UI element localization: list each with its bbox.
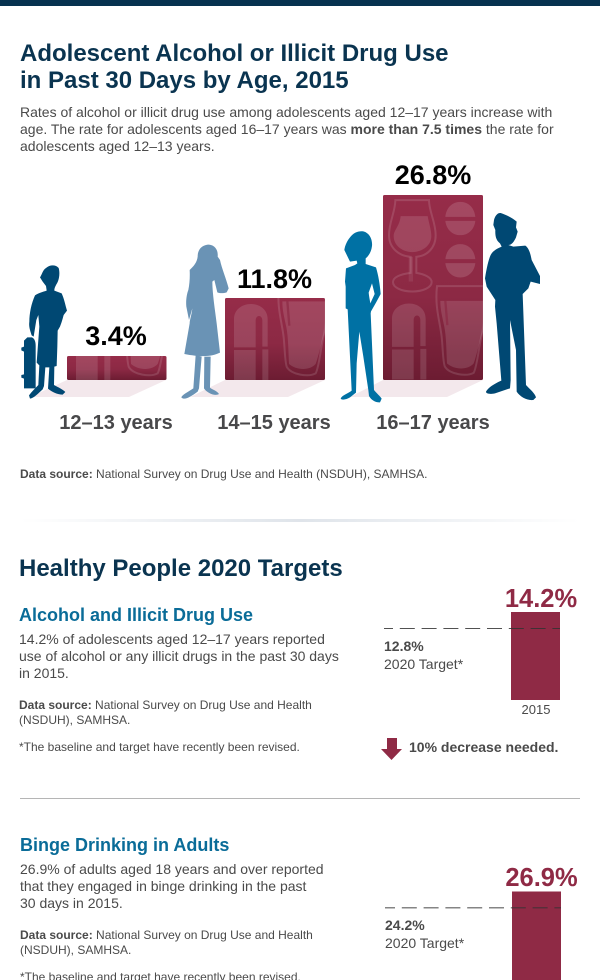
description: [20, 861, 324, 911]
shadow: bar 12–13: [30, 380, 166, 397]
icon: boy with skateboard: [21, 265, 67, 399]
target label: [385, 917, 465, 951]
bar: 14–15 years: [225, 298, 325, 380]
target label: [384, 638, 464, 672]
data source: (NSDUH), SAMHSA.: [19, 713, 130, 727]
description: use of alcohol or any illicit drugs in the past 30 days: [19, 648, 339, 664]
data source: [20, 928, 313, 957]
description: [19, 631, 339, 681]
top banner: [0, 0, 600, 6]
description: in 2015.: [19, 665, 69, 681]
value: 3.4%: 3.4%: [85, 321, 147, 351]
heading: Healthy People 2020 Targets: Healthy People 2020 Targets: [19, 555, 343, 582]
icon: teen girl: [341, 231, 382, 402]
label: 12–13 years: 12–13 years: [59, 412, 173, 434]
description: 30 days in 2015.: [20, 895, 123, 911]
label: 14–15 years: 14–15 years: [217, 412, 331, 434]
bar: 2015 value: [512, 892, 561, 980]
target label: 24.2%: [385, 917, 425, 933]
label: 16–17 years: 16–17 years: [376, 412, 490, 434]
data source: Data source: National Survey on Drug Use and Health: [19, 698, 312, 712]
intro text: age. The rate for adolescents aged 16–17 years was more than 7.5 times the rate for: [20, 121, 554, 137]
icon: girl on phone: [181, 245, 229, 399]
bar label: 2015: 2015: [522, 702, 550, 717]
shadow: bar 16–17: [350, 380, 483, 397]
data source: [19, 698, 312, 727]
chart: rates by age: [21, 160, 540, 434]
data source: chart: Data source: National Survey on Drug Use and Health (NSDUH), SAMHSA.: [20, 467, 428, 481]
subheading: Binge Drinking in Adults: [20, 835, 229, 855]
intro text: adolescents aged 12–13 years.: [20, 138, 215, 154]
value: 14.2%: 14.2%: [505, 585, 577, 613]
title: Adolescent Alcohol or Illicit Drug Use: [20, 40, 449, 67]
target line: [385, 907, 561, 909]
subheading: Alcohol and Illicit Drug Use: [19, 605, 253, 625]
target label: 12.8%: [384, 638, 424, 654]
bar: 2015 value: [511, 612, 560, 700]
target line: [384, 628, 560, 630]
description: that they engaged in binge drinking in the past: [20, 878, 307, 894]
panel: alcohol and illicit drug use: [19, 585, 577, 760]
value: 26.9%: 26.9%: [505, 864, 578, 892]
callout: decrease needed: 10% decrease needed.: [409, 739, 558, 755]
value: 11.8%: 11.8%: [237, 264, 312, 294]
data source: (NSDUH), SAMHSA.: [20, 943, 131, 957]
footnote: *The baseline and target have recently been revised.: [19, 740, 300, 754]
section divider: [20, 519, 580, 522]
intro text: [20, 104, 554, 154]
data source: Data source: National Survey on Drug Use and Health: [20, 928, 313, 942]
description: 14.2% of adolescents aged 12–17 years reported: [19, 631, 325, 647]
intro text: Rates of alcohol or illicit drug use among adolescents aged 12–17 years increase with: [20, 104, 552, 120]
icon: down arrow: [381, 738, 402, 760]
divider: [20, 798, 580, 799]
panel: binge drinking in adults: [20, 835, 578, 980]
title: in Past 30 Days by Age, 2015: [20, 67, 349, 94]
shadow: bar 14–15: [190, 380, 325, 397]
target label: 2020 Target*: [384, 656, 464, 672]
title: [20, 40, 449, 94]
target label: 2020 Target*: [385, 935, 465, 951]
value: 26.8%: 26.8%: [395, 160, 471, 190]
bar: 16–17 years: [383, 195, 484, 380]
description: 26.9% of adults aged 18 years and over reported: [20, 861, 324, 877]
bar: 12–13 years: [67, 356, 166, 380]
icon: teen boy: [485, 213, 540, 400]
